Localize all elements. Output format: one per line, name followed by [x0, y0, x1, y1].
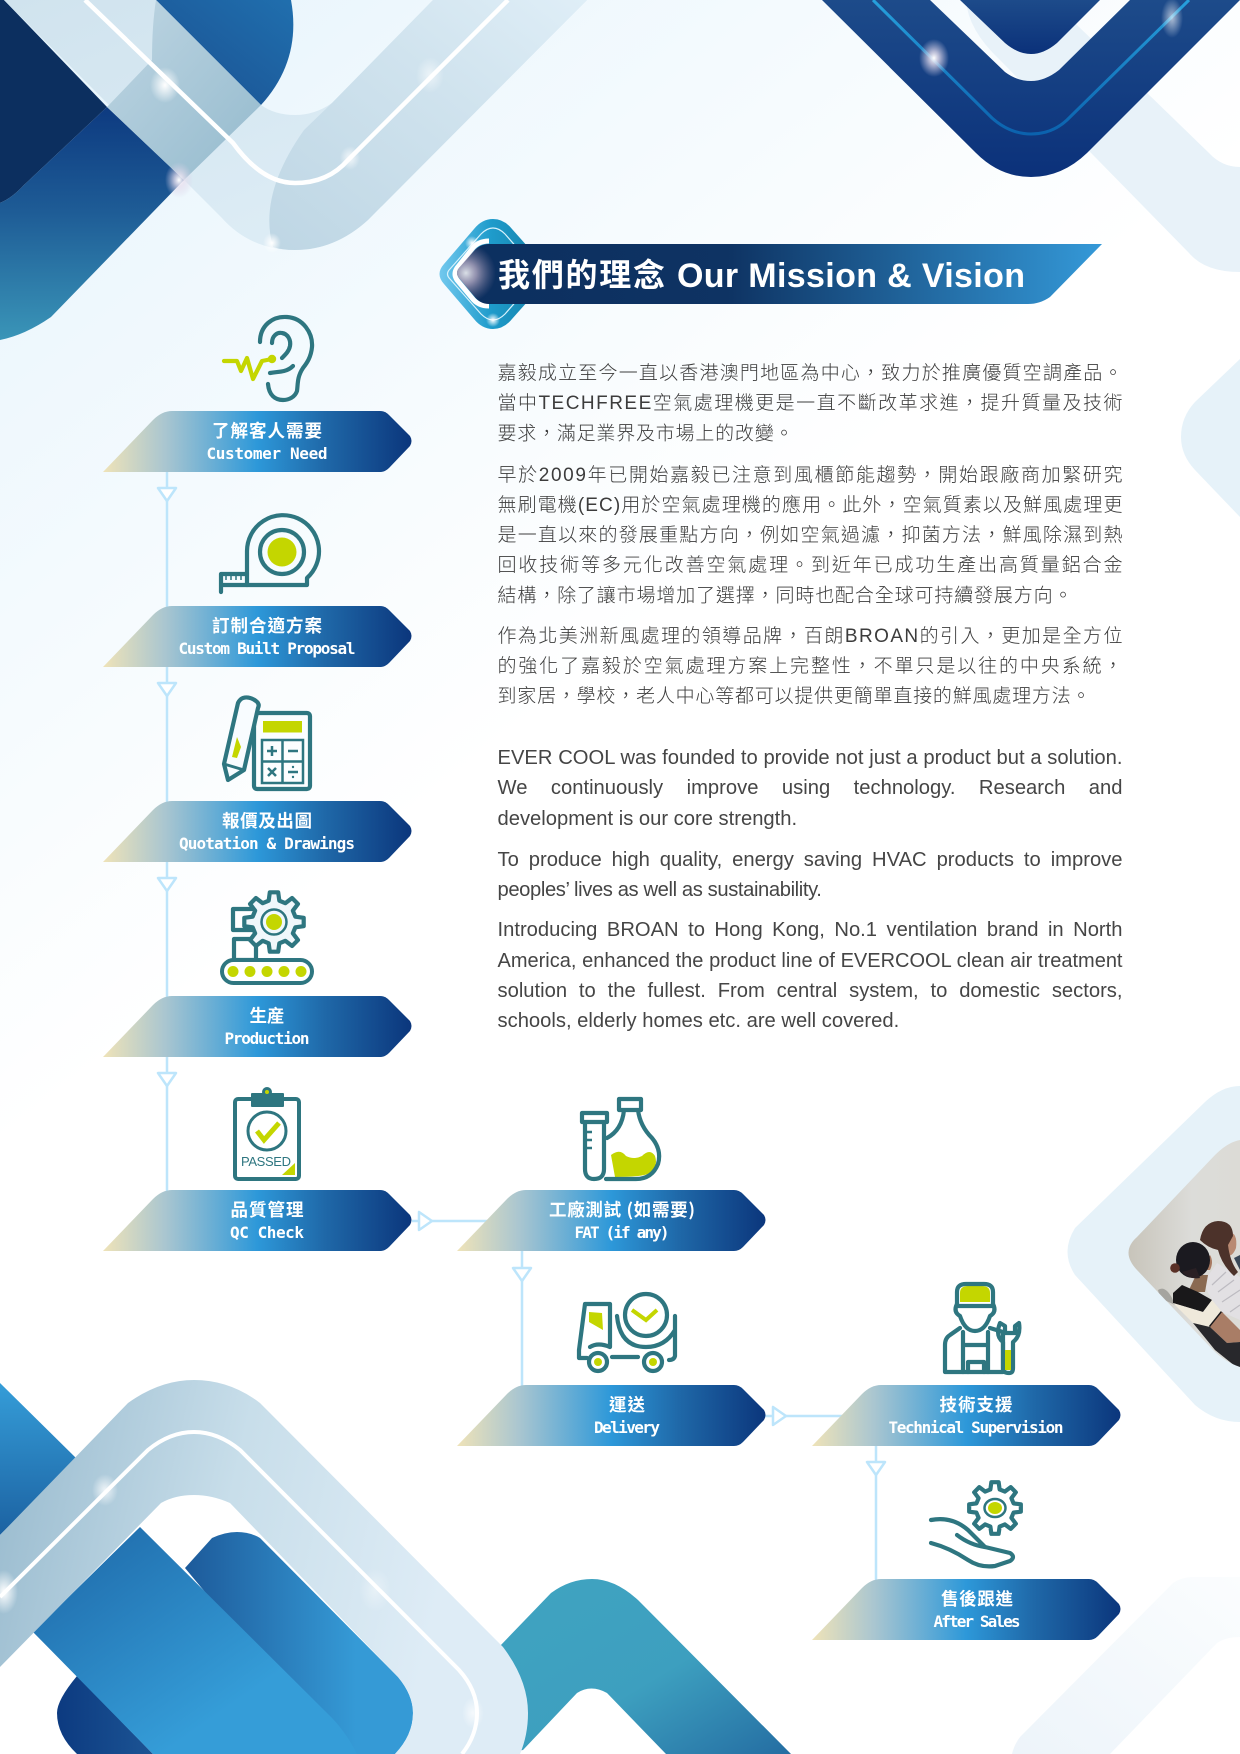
banner: Customer Need: 了解客人需要: [212, 418, 322, 443]
icon: gear and conveyor: [222, 892, 312, 983]
banner: Quotation & Drawings: 報價及出圖: [222, 808, 312, 833]
text block: English mission: development is our core strength.: [498, 808, 797, 830]
step: Customer Need: [103, 317, 412, 472]
title banner: [436, 219, 1102, 329]
decoration: lower-right pale band: [1012, 1577, 1240, 1754]
text block: Chinese mission: 結構，除了讓市場增加了選擇，同時也配合全球可持續發展方向。: [498, 584, 1072, 606]
title text: Our Mission & Vision: [677, 257, 1025, 295]
icon: delivery truck with clock: [579, 1294, 675, 1371]
icon: measuring tape: [221, 515, 319, 592]
step: Custom Built Proposal: [103, 515, 412, 667]
icon: worker with wrench: [945, 1284, 1019, 1373]
step: Delivery: [457, 1294, 766, 1446]
icon: test tube and flask: [582, 1099, 659, 1179]
banner: FAT: FAT (if any): [574, 1223, 670, 1242]
text block: English mission: America, enhanced the product line of EVERCOOL clean air treatment: [498, 950, 1122, 972]
text block: English mission: Introducing BROAN to Hong Kong, No.1 ventilation brand in North: [498, 919, 1122, 941]
banner: Custom Built Proposal: [103, 606, 412, 667]
text block: English mission: peoples’ lives as well as sustainability.: [498, 879, 822, 901]
banner: Production: 生産: [250, 1003, 284, 1028]
text block: Chinese mission: 要求，滿足業界及市場上的改變。: [498, 422, 794, 444]
text block: Chinese mission: 的強化了嘉毅於空氣處理方案上完整性，不單只是以往的中央系統，: [498, 655, 1122, 677]
decoration: top-left ribbons: [0, 0, 587, 340]
title ribbon: [457, 244, 1102, 304]
text block: Chinese mission: 嘉毅成立至今一直以香港澳門地區為中心，致力於推廣優質空調產品。: [498, 362, 1122, 384]
banner: After Sales: After Sales: [934, 1612, 1020, 1631]
text block: English mission: solution to the fullest. From central system, to domestic sectors,: [498, 980, 1122, 1002]
banner: After Sales: 售後跟進: [941, 1586, 1014, 1611]
connector lines and arrows: [158, 472, 885, 1582]
text block: Chinese mission: [498, 362, 1122, 707]
banner: QC Check: [103, 1190, 412, 1251]
banner: Production: [103, 996, 412, 1057]
title text: [498, 257, 1025, 295]
banner: Technical Supervision: [812, 1385, 1120, 1446]
banner: Delivery: [457, 1385, 766, 1446]
text block: English mission: schools, elderly homes etc. are well covered.: [498, 1010, 899, 1032]
text block: Chinese mission: 無刷電機(EC)用於空氣處理機的應用。此外，空氣質素以及鮮風處理更: [498, 493, 1122, 516]
banner: Quotation & Drawings: Quotation & Drawings: [179, 834, 355, 853]
decoration: bottom-left ribbons: [0, 1380, 791, 1754]
title glow: [457, 248, 494, 299]
front person: [1188, 1275, 1208, 1292]
text block: English mission: We continuously improve using technology. Research and: [498, 777, 1122, 799]
banner: FAT: 工廠測試 (如需要): [549, 1197, 695, 1222]
banner: Technical Supervision: 技術支援: [940, 1392, 1013, 1417]
text block: Chinese mission: 是一直以來的發展重點方向，例如空氣過濾，抑菌方法，鮮風除濕到熱: [498, 524, 1122, 546]
text block: English mission: [498, 747, 1122, 1032]
step: Technical Supervision: [812, 1284, 1120, 1446]
step: QC Check: [103, 1087, 412, 1251]
step: After Sales: [812, 1482, 1120, 1640]
banner: FAT: [457, 1190, 766, 1251]
photo panel: pale diamond frame with people: [1068, 1086, 1240, 1422]
banner: Quotation & Drawings: [103, 801, 412, 862]
step: FAT: [457, 1099, 766, 1251]
text block: English mission: EVER COOL was founded to provide not just a product but a solution.: [498, 747, 1122, 769]
banner: Customer Need: [103, 411, 412, 472]
banner: Custom Built Proposal: Custom Built Proposal: [178, 639, 356, 658]
decoration: right pale diamond: [1181, 359, 1240, 517]
banner: Customer Need: Customer Need: [206, 444, 328, 463]
icon: ear: [224, 317, 312, 400]
text block: English mission: To produce high quality, energy saving HVAC products to improve: [498, 849, 1122, 871]
icon: pencil and calculator: [224, 697, 310, 789]
banner: After Sales: [812, 1579, 1120, 1640]
text block: Chinese mission: 早於2009年已開始嘉毅已注意到風櫃節能趨勢，開始跟廠商加緊研究: [498, 464, 1122, 486]
text block: Chinese mission: 到家居，學校，老人中心等都可以提供更簡單直接的鮮風處理方法。: [498, 685, 1090, 707]
text block: Chinese mission: 當中TECHFREE空氣處理機更是一直不斷改革求進，提升質量及技術: [498, 392, 1122, 414]
banner: Delivery: Delivery: [594, 1418, 660, 1437]
icon: title diamond: [440, 219, 552, 329]
step: Production: [103, 892, 412, 1057]
back person: [1203, 1263, 1240, 1320]
banner: QC Check: QC Check: [230, 1223, 304, 1242]
text block: Chinese mission: 回收技術等多元化改善空氣處理。到近年已成功生產出高質量鋁合金: [498, 554, 1122, 576]
title text: 我們的理念: [498, 257, 665, 293]
text block: Chinese mission: 作為北美洲新風處理的領導品牌，百朗BROAN的引入，更加是全方位: [498, 625, 1122, 647]
banner: QC Check: 品質管理: [230, 1197, 304, 1222]
icon: passed clipboard: PASSED: [241, 1154, 291, 1169]
step: Quotation & Drawings: [103, 697, 412, 862]
banner: Technical Supervision: Technical Supervision: [888, 1418, 1064, 1437]
icon: hand holding gear: [931, 1482, 1021, 1566]
banner: Delivery: 運送: [609, 1392, 646, 1417]
icon: passed clipboard: [235, 1087, 299, 1179]
banner: Custom Built Proposal: 訂制合適方案: [212, 613, 322, 638]
banner: Production: Production: [224, 1029, 310, 1048]
decoration: top-right ribbons: [822, 0, 1240, 272]
